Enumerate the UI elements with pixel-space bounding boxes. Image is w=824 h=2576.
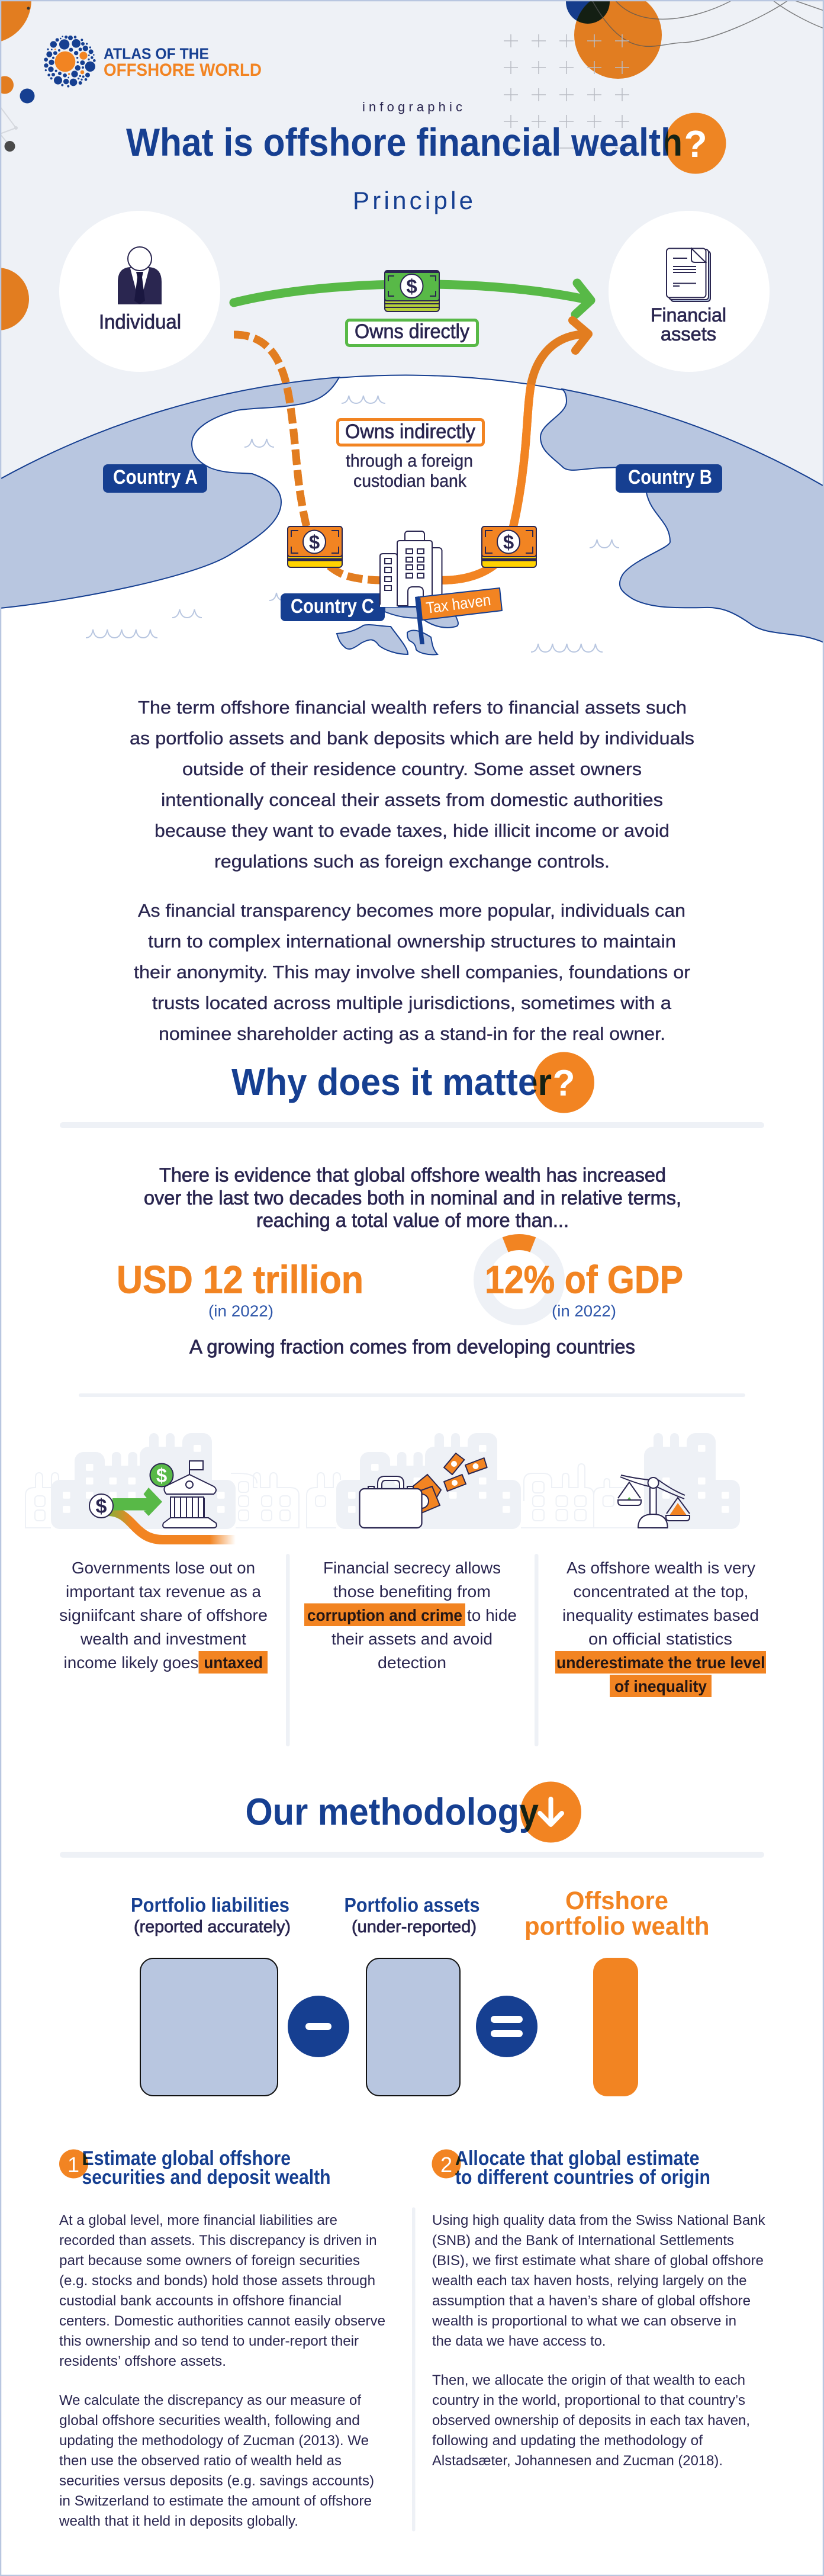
- step 1 text: At a global level, more financial liabilities are: [59, 2212, 337, 2228]
- text column: tax revenue: [59, 1559, 268, 1674]
- icon: briefcase with flying money: [360, 1453, 487, 1528]
- stat: USD 12 trillion: [117, 1258, 363, 1320]
- step 2 text: (SNB) and the Bank of International Settlements: [432, 2233, 734, 2249]
- step 2 text: the data we have access to.: [432, 2333, 606, 2349]
- label: Country C: Country C: [291, 595, 374, 618]
- question mark badge: [533, 1052, 594, 1113]
- step 1 text: centers. Domestic authorities cannot easily observe: [59, 2313, 385, 2329]
- number badge 1: 1: [67, 2153, 79, 2177]
- highlight: underestimate the true level of inequality: of inequality: [614, 1677, 707, 1695]
- label: portfolio assets: [345, 1894, 479, 1936]
- lead text: [144, 1164, 681, 1231]
- circle: Financial assets: [609, 211, 770, 372]
- city skyline outline between: [521, 1464, 645, 1528]
- lead text: There is evidence that global offshore wealth has increased: [159, 1164, 666, 1186]
- step 1 text: part because some owners of foreign securities: [59, 2253, 360, 2269]
- step 1 heading: Estimate global offshore: [82, 2147, 291, 2170]
- step 1 text: (e.g. stocks and bonds) hold those assets through: [59, 2273, 375, 2289]
- label: Financial assets: Financial: [651, 304, 726, 326]
- highlight: underestimate the true level of inequality: [555, 1651, 766, 1697]
- label: Financial assets: assets: [661, 323, 716, 345]
- text column: tax revenue: signiifcant share of offshore: [59, 1606, 268, 1624]
- text column: financial secrecy: to hide: [467, 1606, 517, 1624]
- label: portfolio assets: (under-reported): [352, 1917, 477, 1936]
- step 2 text: Using high quality data from the Swiss National Bank: [432, 2212, 765, 2228]
- lead text: reaching a total value of more than...: [256, 1209, 569, 1231]
- text column: financial secrecy: [304, 1559, 517, 1672]
- number badge 2: 2: [440, 2153, 452, 2177]
- text column: financial secrecy: detection: [378, 1653, 446, 1672]
- equals sign: [476, 1996, 537, 2057]
- green coin: [150, 1464, 173, 1486]
- text: through a foreign custodian bank: custodian bank: [353, 471, 467, 491]
- text column: financial secrecy: their assets and avoid: [331, 1630, 493, 1648]
- step 2 heading: Allocate that global estimate: [455, 2147, 700, 2170]
- text column: financial secrecy: those benefiting from: [333, 1582, 491, 1601]
- step 2 text: country in the world, proportional to that country’s: [432, 2392, 745, 2408]
- highlight: corruption and crime: corruption and crime: [307, 1606, 462, 1624]
- arrow: owns directly: [234, 283, 591, 314]
- text column: tax revenue: income likely goes: [64, 1653, 199, 1672]
- tax haven islands: [337, 607, 458, 655]
- text: developing countries: A growing fraction comes from developing countries: [189, 1336, 635, 1357]
- icon: green money stack: [385, 271, 439, 311]
- subheading: Principle: Principle: [353, 187, 473, 214]
- label: portfolio liabilities: Portfolio liabilities: [131, 1894, 289, 1916]
- decorative circles top right: [566, 0, 824, 79]
- label: Financial assets: [651, 304, 726, 345]
- label: offshore portfolio wealth: Offshore: [565, 1887, 668, 1915]
- arrow: indirect solid path: [441, 320, 588, 580]
- intro text: because they want to evade taxes, hide illicit income or avoid: [154, 820, 670, 841]
- text: through a foreign custodian bank: [346, 451, 473, 491]
- step 1 text: [59, 2212, 385, 2529]
- flag: Tax haven: Tax haven: [425, 591, 492, 617]
- intro text: trusts located across multiple jurisdictions, sometimes with a: [152, 993, 672, 1013]
- step 1 text: recorded than assets. This discrepancy is driven in: [59, 2233, 376, 2249]
- map land: country B: [540, 389, 824, 643]
- box: portfolio liabilities: [140, 1958, 278, 2096]
- icon: tax revenue flowing away from government: [89, 1461, 236, 1540]
- intro text: The term offshore financial wealth refers to financial assets such: [138, 697, 687, 718]
- title: What is offshore financial wealth: [126, 120, 683, 164]
- step 1 text: then use the observed ratio of wealth held as: [59, 2453, 342, 2469]
- icon: green money stack: $: [406, 275, 417, 297]
- bank: [163, 1461, 217, 1528]
- step 2 heading: [432, 2147, 710, 2189]
- step 2 text: wealth is proportional to what we can observe in: [432, 2313, 736, 2329]
- sea waves: [86, 396, 619, 652]
- city skyline backdrop 2: [307, 1433, 521, 1529]
- step 1 text: We calculate the discrepancy as our measure of: [59, 2392, 361, 2408]
- eyebrow: infographic: infographic: [362, 99, 462, 114]
- flying bills: [444, 1453, 487, 1491]
- step 1 text: residents’ offshore assets.: [59, 2353, 226, 2369]
- question mark badge: ?: [684, 123, 707, 165]
- step 2 text: observed ownership of deposits in each tax haven,: [432, 2413, 750, 2429]
- text: through a foreign custodian bank: through a foreign: [346, 451, 473, 471]
- circle: Individual: [59, 211, 220, 372]
- hero background: [0, 0, 824, 711]
- flow: untaxed income: [108, 1511, 236, 1540]
- step 1 text: custodial bank accounts in offshore financial: [59, 2293, 342, 2309]
- green coin: $: [156, 1464, 167, 1486]
- step 1 text: securities versus deposits (e.g. savings accounts): [59, 2473, 374, 2489]
- stat: USD 12 trillion: (in 2022): [208, 1302, 273, 1320]
- step 1 text: this ownership and so tend to under-report their: [59, 2333, 359, 2349]
- step 1 heading: securities and deposit wealth: [82, 2166, 330, 2189]
- arrow: green: [112, 1488, 162, 1516]
- intro text: regulations such as foreign exchange controls.: [214, 851, 610, 872]
- logo: [44, 36, 262, 88]
- decorative circles top left: [0, 0, 34, 330]
- label: Country A: Country A: [113, 466, 198, 489]
- text column: financial secrecy: Financial secrecy allows: [323, 1559, 501, 1577]
- intro text: as portfolio assets and bank deposits which are held by individuals: [130, 728, 694, 749]
- text column: inequality: on official statistics: [588, 1630, 732, 1648]
- icon: bank building: [380, 531, 442, 607]
- step 2 text: Then, we allocate the origin of that wealth to each: [432, 2372, 745, 2388]
- step 1 text: in Switzerland to estimate the amount of offshore: [59, 2493, 372, 2509]
- city skyline backdrop 3: [644, 1433, 740, 1529]
- stat: 12% of GDP: 12% of GDP: [485, 1258, 683, 1302]
- highlight: underestimate the true level of inequality: underestimate the true level: [556, 1653, 765, 1672]
- text column: inequality: As offshore wealth is very: [566, 1559, 755, 1577]
- stat: 12% of GDP: (in 2022): [552, 1302, 616, 1320]
- icon: unbalanced scales: [618, 1475, 690, 1528]
- heading: Our methodology: Our methodology: [245, 1791, 539, 1833]
- intro text: turn to complex international ownership structures to maintain: [148, 931, 676, 952]
- label: Country B: [616, 464, 722, 493]
- logo wordmark: [104, 45, 262, 80]
- text column: tax revenue: wealth and investment: [80, 1630, 246, 1648]
- number badge 2: [432, 2150, 461, 2178]
- decorative plus grid: [504, 34, 629, 148]
- heading: Why does it matter: Why does it matter: [231, 1061, 552, 1103]
- question mark badge: ?: [553, 1063, 575, 1104]
- logo mark: [44, 36, 96, 88]
- text column: tax revenue: important tax revenue as a: [66, 1582, 261, 1601]
- intro text: As financial transparency becomes more popular, individuals can: [138, 900, 685, 921]
- intro text: nominee shareholder acting as a stand-in for the real owner.: [159, 1023, 665, 1044]
- step 2 text: (BIS), we first estimate what share of global offshore: [432, 2253, 764, 2269]
- step 2 text: following and updating the methodology of: [432, 2433, 703, 2449]
- label: portfolio assets: Portfolio assets: [345, 1894, 479, 1916]
- minus sign: [288, 1996, 349, 2057]
- label: portfolio liabilities: (reported accurately): [134, 1917, 291, 1936]
- label: owns indirectly: Owns indirectly: [345, 420, 475, 443]
- box: portfolio assets: [366, 1958, 460, 2096]
- label: Individual: Individual: [99, 311, 181, 333]
- flag: Tax haven: [415, 588, 502, 644]
- step 1 heading: [59, 2147, 330, 2189]
- step 1 text: wealth that it held in deposits globally.: [59, 2513, 298, 2529]
- label: portfolio liabilities: [131, 1894, 291, 1936]
- lead text: over the last two decades both in nominal and in relative terms,: [144, 1187, 681, 1209]
- logo wordmark: ATLAS OF THE: [104, 45, 209, 63]
- map land: country A: [0, 377, 339, 608]
- label: offshore portfolio wealth: portfolio wealth: [524, 1912, 709, 1941]
- question mark badge: [665, 113, 726, 174]
- intro text: outside of their residence country. Some asset owners: [182, 759, 642, 779]
- step 2 text: assumption that a haven’s share of global offshore: [432, 2293, 751, 2309]
- heading: Our methodology: [245, 1781, 581, 1843]
- icon: orange money stack left: [288, 526, 342, 567]
- logo wordmark: OFFSHORE WORLD: [104, 60, 262, 80]
- stat: USD 12 trillion: USD 12 trillion: [117, 1258, 363, 1302]
- arrow: indirect dashed path: [234, 335, 385, 580]
- intro text: intentionally conceal their assets from domestic authorities: [161, 789, 663, 810]
- intro text: their anonymity. This may involve shell companies, foundations or: [134, 962, 690, 982]
- coin: $: [96, 1495, 107, 1518]
- step 1 text: updating the methodology of Zucman (2013). We: [59, 2433, 369, 2449]
- icon: orange money stack right: $: [503, 531, 514, 553]
- icon: person in suit: [118, 247, 162, 304]
- text column: inequality: concentrated at the top,: [573, 1582, 748, 1601]
- donut chart: 12% of GDP: [482, 1234, 556, 1317]
- highlight: untaxed: untaxed: [204, 1653, 263, 1672]
- step 1 text: global offshore securities wealth, following and: [59, 2413, 360, 2429]
- intro text: [130, 697, 694, 1044]
- icon: orange money stack left: $: [309, 531, 320, 553]
- step 2 heading: to different countries of origin: [455, 2166, 710, 2189]
- label: offshore portfolio wealth: [524, 1887, 709, 1941]
- icon: documents: [667, 249, 710, 301]
- step 2 text: [432, 2212, 765, 2469]
- arrow badge: [520, 1781, 581, 1843]
- bar: offshore portfolio wealth: [593, 1958, 638, 2096]
- step 2 text: Alstadsæter, Johannesen and Zucman (2018).: [432, 2453, 723, 2469]
- label: owns directly: Owns directly: [355, 320, 469, 343]
- city skyline backdrop 1: [25, 1433, 299, 1529]
- number badge 1: [59, 2150, 88, 2178]
- stat: 12% of GDP: [485, 1258, 683, 1320]
- text column: inequality: inequality estimates based: [562, 1606, 759, 1624]
- icon: orange money stack right: [482, 526, 536, 567]
- text column: inequality: [555, 1559, 766, 1697]
- coin: [89, 1494, 113, 1518]
- step 2 text: wealth each tax haven hosts, relying largely on the: [432, 2273, 747, 2289]
- heading: Why does it matter: [231, 1052, 594, 1113]
- text column: tax revenue: Governments lose out on: [72, 1559, 255, 1577]
- label: Country B: Country B: [628, 466, 712, 489]
